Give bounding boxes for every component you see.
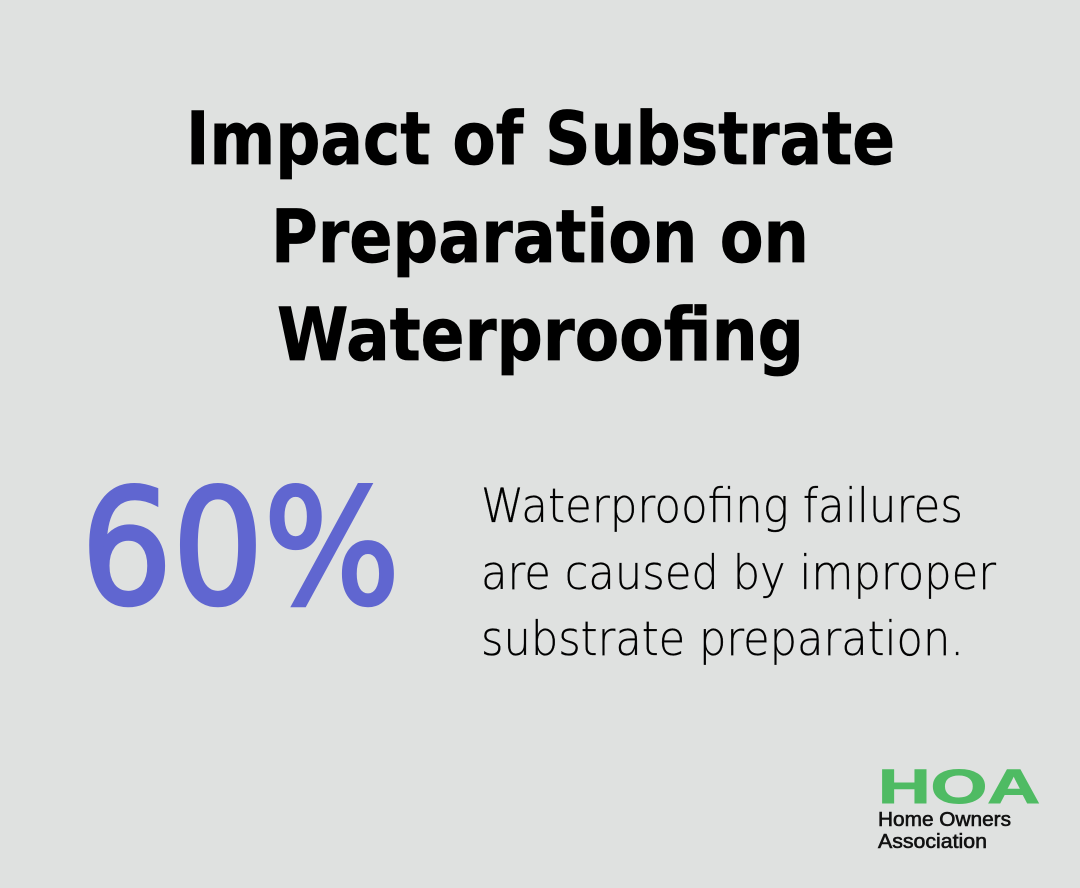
title: Waterproofing (277, 293, 804, 378)
logo wordmark (878, 809, 1011, 853)
statistic description: are caused by improper (481, 546, 997, 601)
title (186, 97, 895, 378)
logo mark: HOA: HOA (878, 761, 1040, 814)
logo: Home Owners Association (878, 761, 1040, 853)
statistic description: substrate preparation. (481, 612, 964, 667)
statistic description (481, 479, 997, 667)
title: Preparation on (271, 195, 809, 280)
logo wordmark: Association (878, 831, 987, 853)
logo wordmark: Home Owners (878, 809, 1011, 831)
statistic: 60%: 60% (81, 456, 400, 641)
title: Impact of Substrate (186, 97, 895, 182)
statistic description: Waterproofing failures (481, 479, 963, 534)
